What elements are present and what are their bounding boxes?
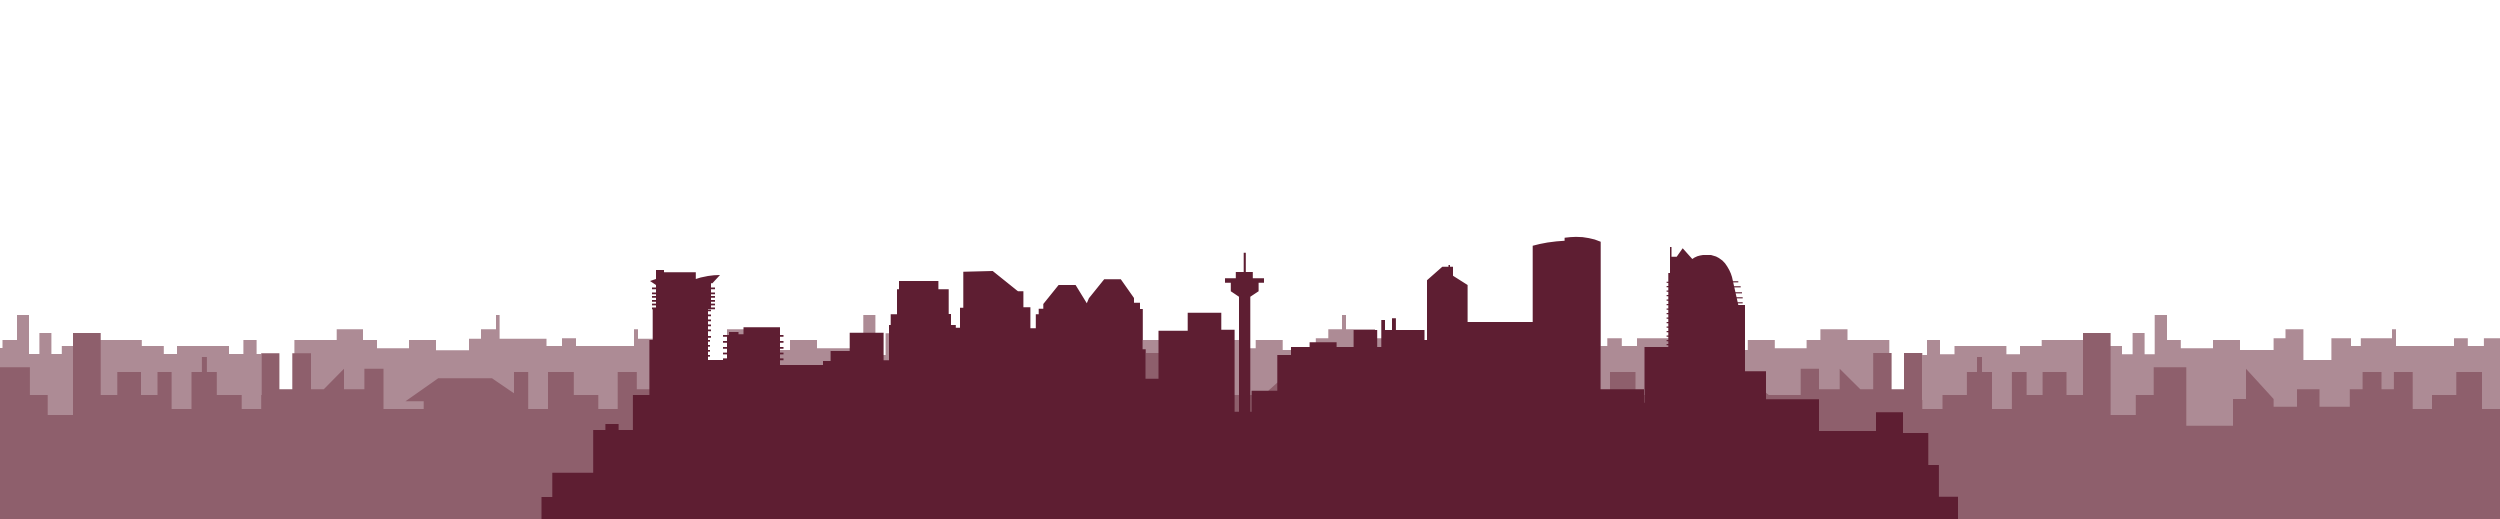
background skyline layer (light) (0, 315, 2500, 430)
balcony ticks: curved tower (1667, 281, 1743, 345)
balcony ticks: left twin tower (652, 288, 715, 357)
foreground skyline layer (dark) (542, 237, 1958, 519)
mid layer silhouette (0, 333, 2500, 519)
foreground silhouette (542, 237, 1958, 519)
middle skyline layer (0, 333, 2500, 519)
balcony ticks: small apartment block (723, 335, 784, 360)
mid layer fragments between foreground towers (1146, 353, 1775, 400)
